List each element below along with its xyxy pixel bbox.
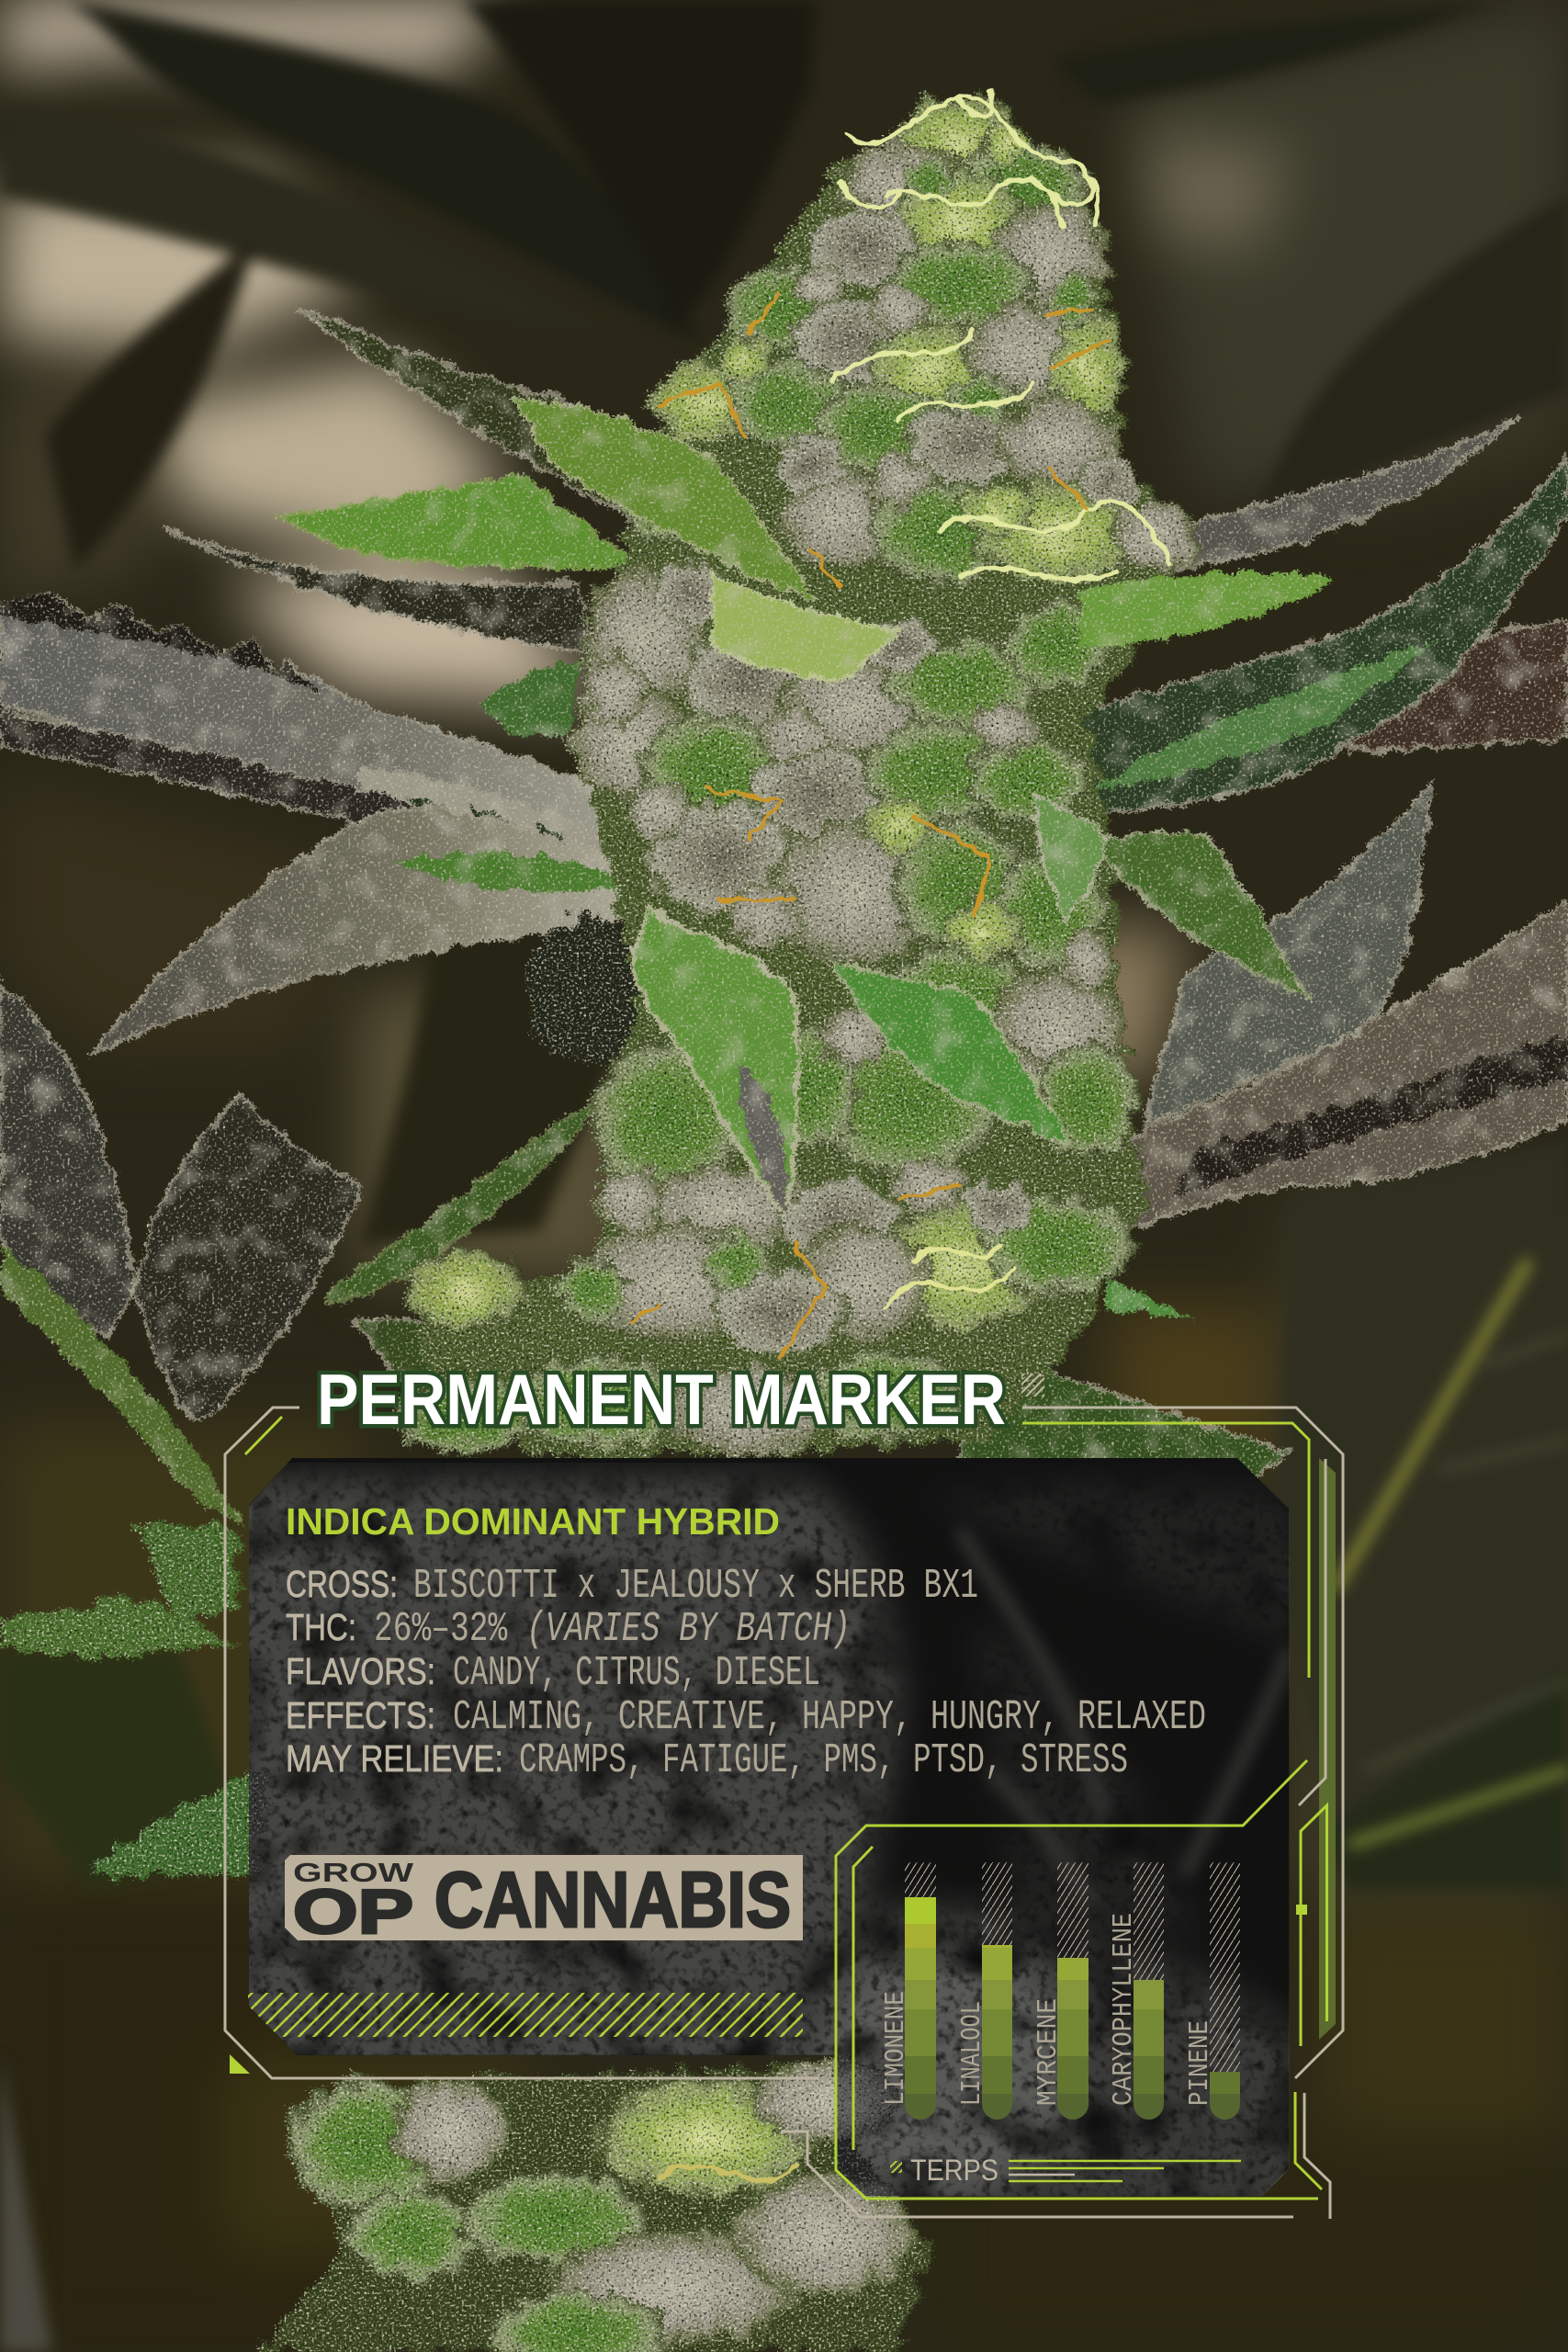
logo: Grow Op Cannabis: CANNABIS [434, 1857, 791, 1944]
frame line: green terps box [836, 1760, 1318, 2199]
title: PERMANENT MARKER [317, 1359, 1006, 1440]
line: effects: CALMING, CREATIVE, HAPPY, HUNGRY, RELAXED [453, 1694, 1206, 1741]
lower bud and lower foliage [0, 1522, 930, 2352]
line: may relieve [286, 1737, 1128, 1784]
line: thc: 26%–32% (VARIES BY BATCH) [374, 1606, 851, 1653]
line: flavors: FLAVORS: [286, 1650, 435, 1692]
background leaves [0, 308, 1568, 1530]
bar: myrcene: MYRCENE [1032, 1998, 1065, 2106]
line: effects: EFFECTS: [286, 1694, 435, 1736]
logo: Grow Op Cannabis [285, 1855, 803, 1947]
frame line: green top right [1022, 1423, 1309, 1678]
corner triangle [230, 2054, 250, 2074]
pistils [629, 90, 1169, 2180]
frame: tech corner lines [225, 1408, 1343, 2219]
frame line: green terps inner [853, 1847, 873, 2150]
terps legend: TERPS [910, 2154, 998, 2187]
line: cross: BISCOTTI x JEALOUSY x SHERB BX1 [413, 1563, 978, 1610]
line: thc: THC: [286, 1606, 356, 1648]
line: flavors: CANDY, CITRUS, DIESEL [453, 1650, 820, 1697]
panel: dark strain info backdrop [249, 1458, 1289, 2196]
terps legend [890, 2154, 1241, 2187]
bar: limonene: LIMONENE [880, 1991, 912, 2106]
strain type heading: INDICA DOMINANT HYBRID [286, 1500, 780, 1543]
frame line: green bottom right [1295, 2092, 1322, 2189]
hatch strip [248, 1993, 803, 2037]
line: may relieve: CRAMPS, FATIGUE, PMS, PTSD, STRESS [519, 1737, 1128, 1784]
side bar: olive vertical [1296, 1458, 1336, 2046]
bar: limonene [880, 1862, 936, 2120]
bar: caryophyllene [1108, 1862, 1164, 2120]
panel backing shapes [209, 1458, 1319, 2220]
bar chart: terpenes [880, 1862, 1240, 2120]
frame line: beige bottom right [1304, 2093, 1330, 2219]
line: cross [286, 1563, 978, 1610]
frame line: outer beige left [225, 1408, 819, 2078]
logo: Grow Op Cannabis: GROW [293, 1859, 414, 1888]
line: cross: CROSS: [286, 1563, 398, 1605]
main bud [389, 95, 1200, 1463]
bar: pinene: PINENE [1184, 2020, 1216, 2106]
strain details text block [286, 1563, 1206, 1784]
bar: pinene [1184, 1862, 1240, 2120]
line: may relieve: MAY RELIEVE: [286, 1737, 503, 1780]
bar: linalool: LINALOOL [956, 2001, 988, 2106]
bar: caryophyllene: CARYOPHYLLENE [1108, 1913, 1140, 2106]
foreground leaves [479, 398, 1334, 1320]
bar: linalool [956, 1862, 1012, 2120]
frame line: outer beige right [1022, 1408, 1343, 2078]
frame line: green top left tick [245, 1417, 282, 1454]
line: flavors [286, 1650, 820, 1697]
logo: Grow Op Cannabis: OP [293, 1877, 413, 1947]
title hatch mark [1021, 1374, 1044, 1396]
small calyx details [556, 119, 1139, 1320]
line: effects [286, 1694, 1206, 1741]
bar: myrcene [1032, 1862, 1089, 2120]
frame line: beige bottom [781, 2132, 1293, 2217]
